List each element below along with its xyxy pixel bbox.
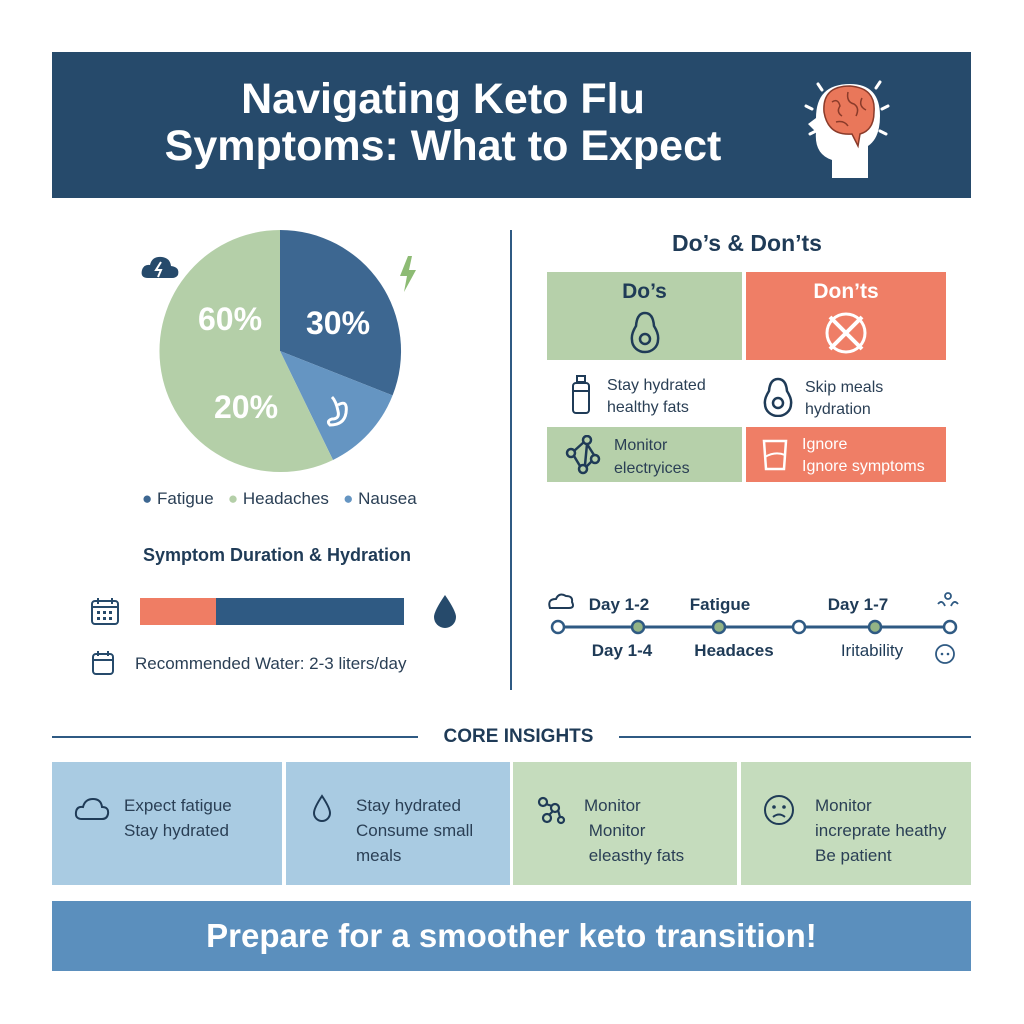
heading: core insights: CORE INSIGHTS xyxy=(444,726,593,747)
timeline: Day 1-2 xyxy=(589,595,649,614)
timeline xyxy=(548,592,959,664)
card: monitor: Monitor xyxy=(589,821,645,840)
card: monitor: eleasthy fats xyxy=(589,846,684,865)
pie chart: 30% xyxy=(306,305,370,341)
do item: monitor electrolytes: electryices xyxy=(614,460,690,477)
do item: monitor electrolytes: Monitor xyxy=(614,437,667,454)
heading: do's & don'ts: Do’s & Don’ts xyxy=(672,230,822,256)
title: Symptoms: What to Expect xyxy=(165,122,721,170)
card: expect fatigue xyxy=(52,762,282,885)
icon: head with brain xyxy=(804,80,890,178)
timeline: Headaces xyxy=(694,641,774,660)
don't item: skip meals: Skip meals xyxy=(805,379,883,396)
do item: hydration: Stay hydrated xyxy=(607,377,706,394)
pie chart: 60% xyxy=(198,301,262,337)
pie chart xyxy=(160,230,402,472)
title: Navigating Keto Flu xyxy=(241,75,645,123)
icon: calendar xyxy=(91,598,119,625)
card: be patient xyxy=(741,762,971,885)
timeline: Day 1-4 xyxy=(592,641,653,660)
card: monitor xyxy=(513,762,737,885)
don't item: ignore symptoms: Ignore symptoms xyxy=(802,458,925,475)
header banner xyxy=(52,52,971,198)
card: be patient: Be patient xyxy=(815,846,892,865)
footer banner xyxy=(52,901,971,971)
card: stay hydrated xyxy=(286,762,510,885)
do item: hydration: healthy fats xyxy=(607,399,689,416)
card: stay hydrated: Consume small xyxy=(356,821,473,840)
card: be patient: Monitor xyxy=(815,796,872,815)
don't item: skip meals: hydration xyxy=(805,401,871,418)
pie chart: 20% xyxy=(214,389,278,425)
panel: don'ts header: Don’ts xyxy=(813,280,879,303)
icon: storm cloud xyxy=(142,256,178,278)
timeline: Fatigue xyxy=(690,595,750,614)
icon: calendar small xyxy=(92,651,114,675)
timeline: Day 1-7 xyxy=(828,595,888,614)
card: stay hydrated: Stay hydrated xyxy=(356,796,461,815)
card: be patient: increprate heathy xyxy=(815,821,946,840)
card: expect fatigue: Stay hydrated xyxy=(124,821,229,840)
card: monitor: Monitor xyxy=(584,796,641,815)
do item: hydration xyxy=(572,375,706,416)
do item: monitor electrolytes xyxy=(547,427,742,482)
card: expect fatigue: Expect fatigue xyxy=(124,796,232,815)
don't item: skip meals xyxy=(764,378,883,418)
icon: water drop xyxy=(434,595,456,628)
title xyxy=(165,75,721,170)
heading: symptom duration: Symptom Duration & Hydration xyxy=(143,545,411,565)
panel: do's header: Do’s xyxy=(622,280,667,303)
panel: do's header xyxy=(547,272,742,360)
duration bar xyxy=(140,598,404,625)
don't item: ignore symptoms xyxy=(746,427,946,482)
don't item: ignore symptoms: Ignore xyxy=(802,436,847,453)
footer banner: Prepare for a smoother keto transition! xyxy=(206,917,817,954)
card: stay hydrated: meals xyxy=(356,846,401,865)
water recommendation text: Recommended Water: 2-3 liters/day xyxy=(135,654,406,673)
timeline: Iritability xyxy=(841,641,904,660)
icon: lightning xyxy=(400,256,416,292)
pie legend: ● Fatigue ● Headaches ● Nausea xyxy=(142,489,417,508)
panel: don'ts header xyxy=(746,272,946,360)
